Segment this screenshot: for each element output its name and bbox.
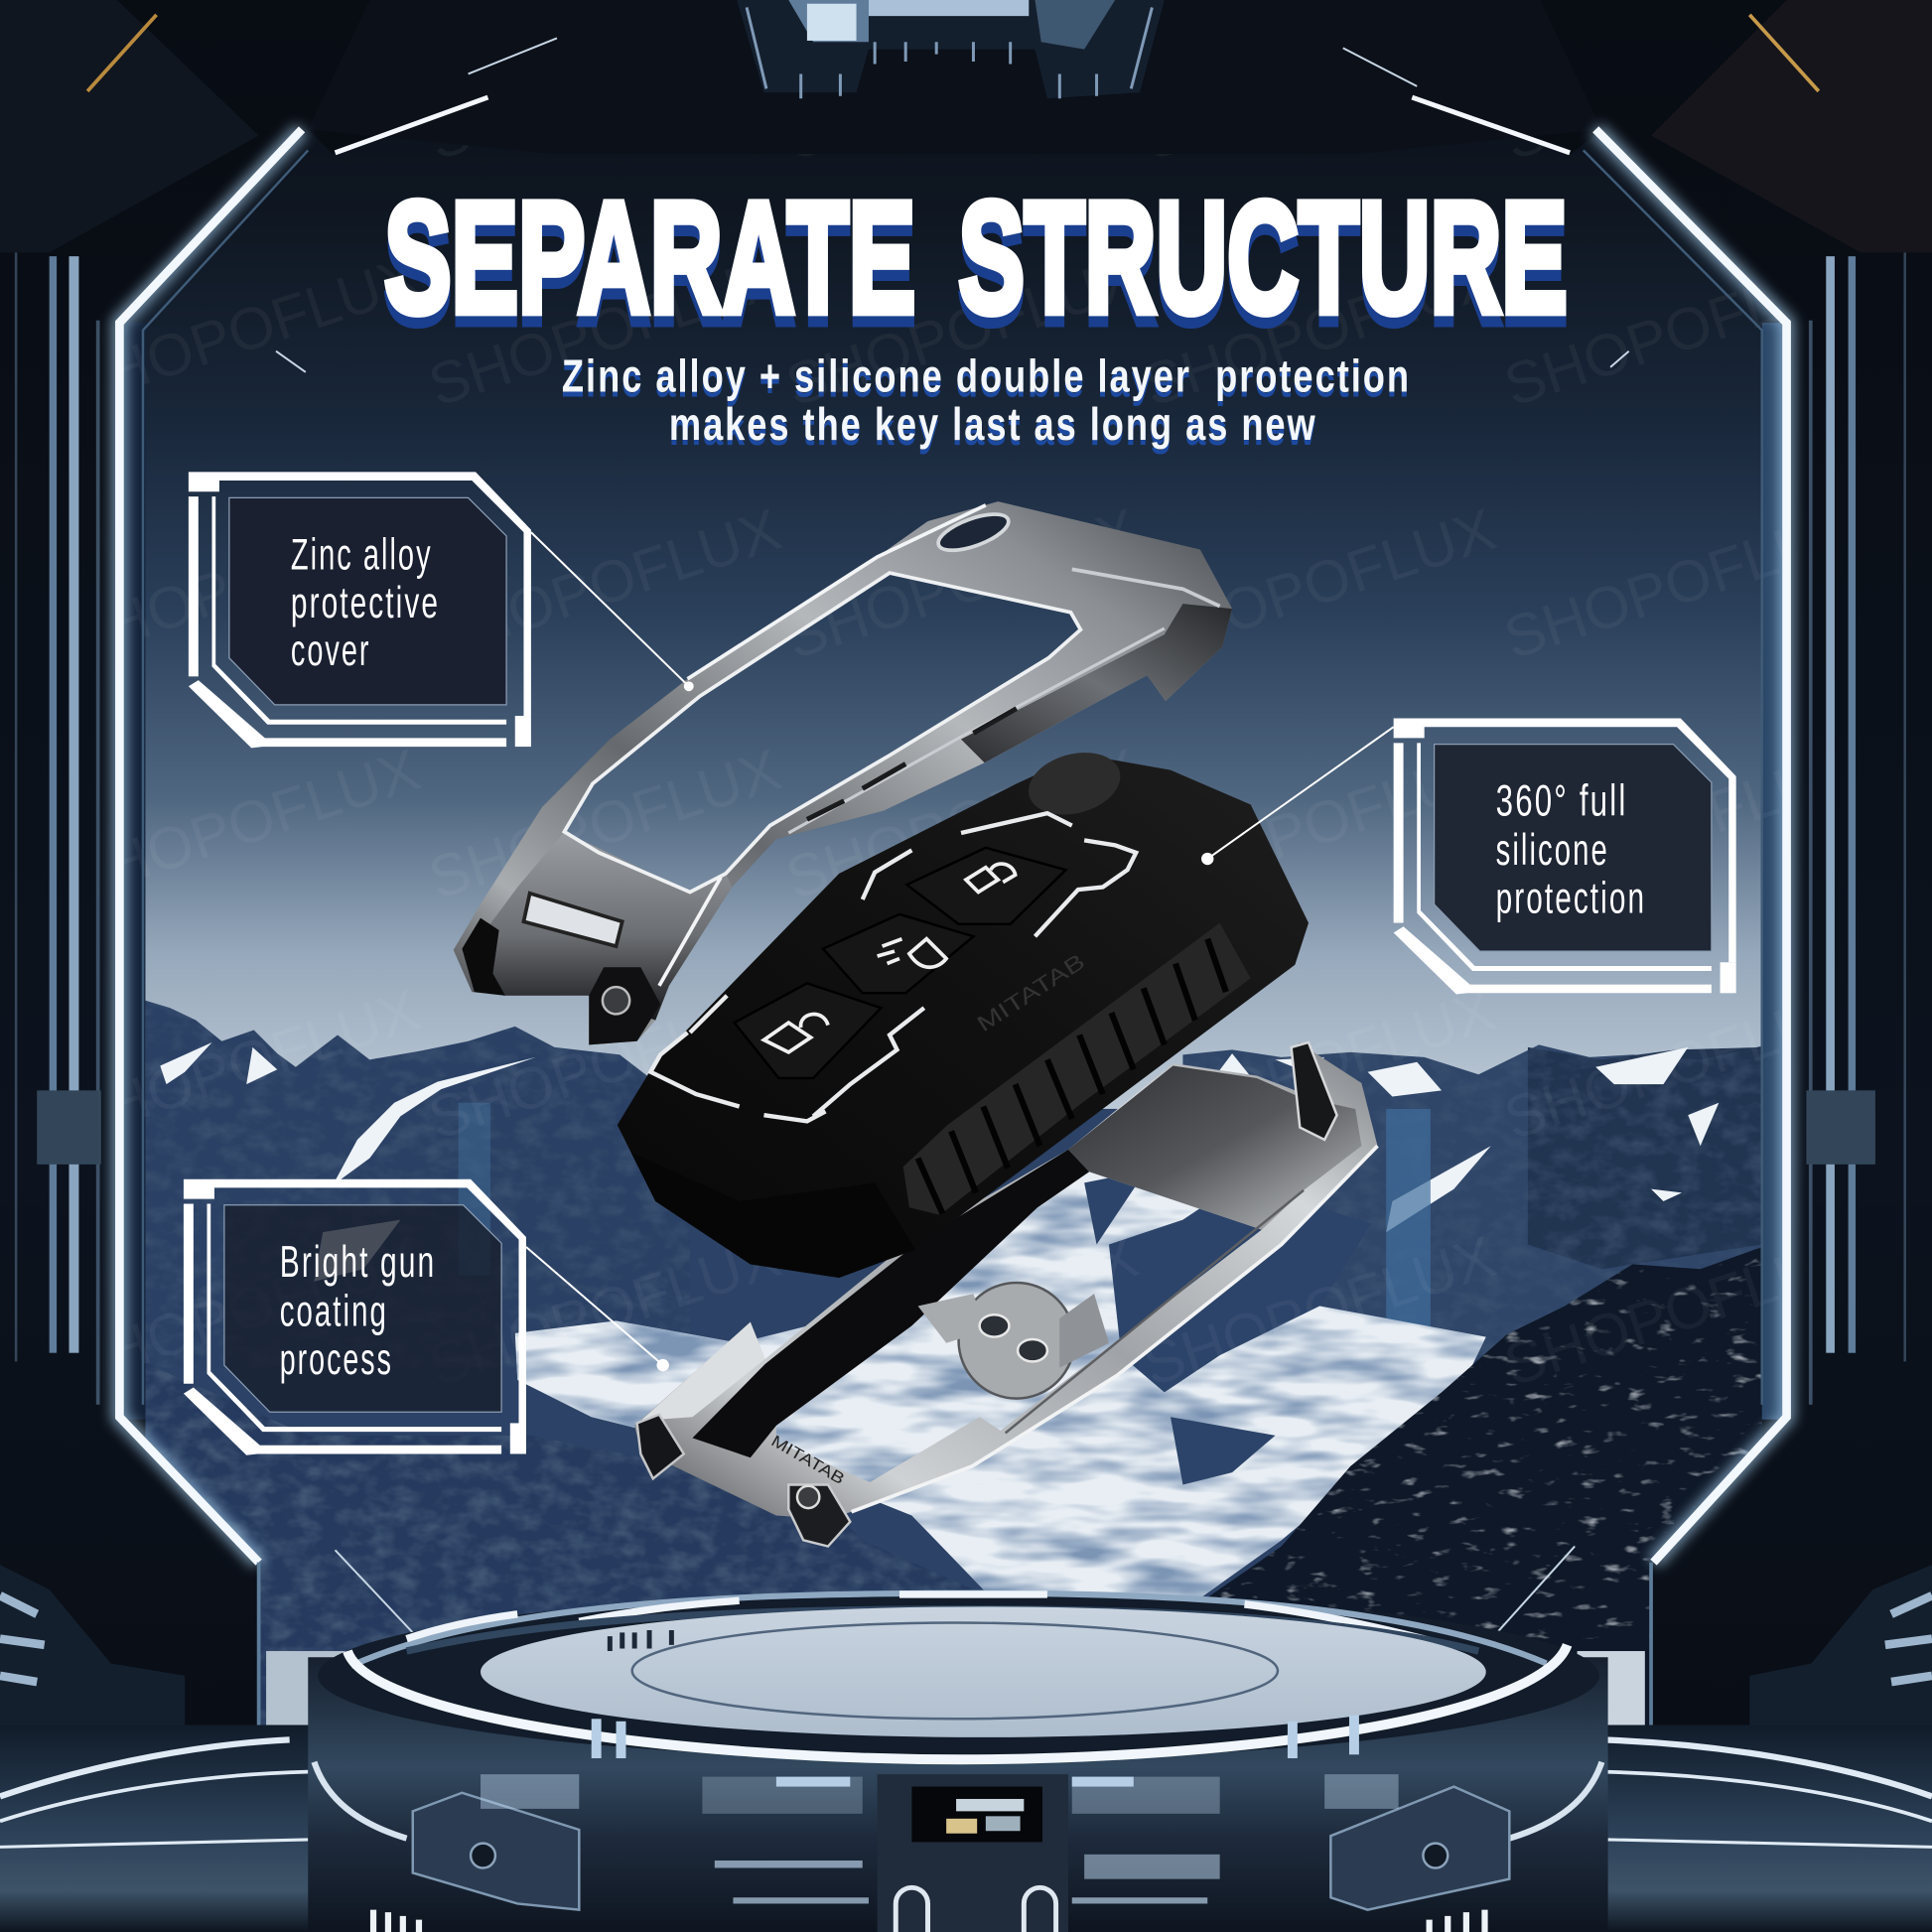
watermark: SHOPOFLUX: SHOPOFLUX: [421, 243, 788, 419]
right black screw tab: [589, 967, 660, 1044]
lower shell inner sheet: [1068, 1066, 1361, 1230]
title: [384, 169, 1568, 356]
watermark: SHOPOFLUX: SHOPOFLUX: [1496, 736, 1863, 911]
round plate with two holes: [918, 1283, 1109, 1399]
orange accent light right: [1749, 15, 1819, 91]
lower shell chrome edge: [852, 1146, 1378, 1512]
watermark: SHOPOFLUX: SHOPOFLUX: [778, 243, 1146, 419]
right wall pillar lines: [1809, 252, 1906, 1405]
callout panel shape: [224, 1205, 501, 1412]
watermark: SHOPOFLUX: SHOPOFLUX: [421, 0, 788, 173]
shell window chrome rim: [564, 573, 1080, 893]
watermark: SHOPOFLUX: SHOPOFLUX: [778, 976, 1146, 1152]
key button bottom: unlock: [735, 983, 881, 1078]
fob ribbed grip: [903, 923, 1251, 1215]
subtitle: Zinc alloy + silicone double layer protection: [562, 350, 1411, 402]
shell front slot: [523, 894, 622, 946]
silicone key fob body: [618, 743, 1309, 1278]
fob top button nub: [1022, 743, 1127, 824]
watermark: SHOPOFLUX: SHOPOFLUX: [1136, 0, 1503, 173]
snow field: [514, 1172, 1486, 1596]
top shell: zinc alloy protective cover: [454, 501, 1232, 1044]
watermark: SHOPOFLUX: SHOPOFLUX: [1136, 736, 1503, 911]
left black screw tab: [462, 918, 505, 996]
callout text: [280, 1238, 436, 1384]
callout text: Zinc alloy: [291, 530, 433, 579]
disc inner circle: [632, 1622, 1278, 1719]
blue tower right: [1386, 1109, 1431, 1343]
callout text: silicone: [1496, 826, 1609, 875]
platform cylinder: [308, 1657, 1608, 1932]
ring bright segments: [407, 1594, 1442, 1644]
watermark: SHOPOFLUX: SHOPOFLUX: [778, 1222, 1146, 1399]
glowing window frame: [119, 129, 1787, 1725]
disc tick marks: [610, 1630, 671, 1651]
subtitle: Zinc alloy + silicone double layer protection: [562, 355, 1411, 407]
lower shell clip tab: [1292, 1042, 1337, 1140]
callout text: process: [280, 1335, 393, 1384]
watermark: SHOPOFLUX: SHOPOFLUX: [60, 976, 427, 1152]
watermark: SHOPOFLUX: SHOPOFLUX: [1136, 1222, 1503, 1399]
background: mountain landscape: [145, 998, 1768, 1749]
lower wall glints: [0, 1595, 1932, 1682]
shell chrome highlights: [659, 505, 1220, 986]
engraved brand on fob: MITATAB: [972, 949, 1089, 1036]
ceiling dark fill: [308, 0, 1601, 154]
mountain snow patches: [160, 1042, 1719, 1282]
shell dark right flank: [961, 604, 1232, 762]
title: SEPARATE: [384, 169, 915, 345]
platform disc: [481, 1606, 1486, 1737]
watermark: SHOPOFLUX: SHOPOFLUX: [1136, 976, 1503, 1152]
callout: bright gun coating process: [184, 1179, 526, 1455]
left lower machinery: [0, 1565, 185, 1774]
key button middle: headlight: [823, 914, 973, 993]
callout text: protective: [291, 579, 440, 627]
shell key-ring hole: [934, 507, 1013, 558]
lower shell left chrome plate: [640, 1322, 765, 1421]
watermark: SHOPOFLUX: SHOPOFLUX: [421, 495, 788, 671]
watermark: SHOPOFLUX: SHOPOFLUX: [1496, 976, 1863, 1152]
title: SEPARATE: [384, 180, 915, 356]
side console right: [1578, 1651, 1645, 1725]
left wall pillar lines: [15, 252, 100, 1405]
title: STRUCTURE: [959, 169, 1568, 345]
background: sky through window: [0, 0, 1932, 1109]
callout text: cover: [291, 626, 371, 675]
watermark: SHOPOFLUX: SHOPOFLUX: [60, 736, 427, 911]
watermark: SHOPOFLUX: SHOPOFLUX: [1496, 1222, 1863, 1399]
callout frame: [189, 472, 531, 748]
watermark: SHOPOFLUX: SHOPOFLUX: [1136, 495, 1503, 671]
shell dark lower-left body: [472, 832, 732, 1021]
circular platform: [308, 1591, 1608, 1932]
callout text: [1496, 777, 1646, 923]
leader line: gun coating callout: [526, 1247, 669, 1371]
lower-left screw joint: [637, 1415, 684, 1478]
callout text: Bright gun: [280, 1238, 436, 1287]
ceiling corner left: [0, 0, 259, 252]
ceiling light bar left: [336, 97, 487, 153]
watermark: SHOPOFLUX: SHOPOFLUX: [778, 495, 1146, 671]
leader line: zinc alloy callout: [531, 532, 694, 691]
lower shell: bright gun coating: [634, 1042, 1378, 1547]
console screen: [911, 1787, 1042, 1842]
platform glowing lower ring: [347, 1645, 1568, 1759]
watermark: SHOPOFLUX: SHOPOFLUX: [421, 736, 788, 911]
lower shell dark inner rail: [692, 1150, 1089, 1457]
watermark: SHOPOFLUX: SHOPOFLUX: [778, 736, 1146, 911]
subtitle: makes the key last as long as new: [669, 403, 1317, 455]
callout panel shape: [229, 497, 506, 705]
shell side slots: [807, 709, 1017, 819]
platform side curves: [314, 1762, 1601, 1839]
callout: 360 full silicone protection: [1394, 719, 1736, 995]
callout frame: [184, 1179, 526, 1455]
top center machinery: [737, 0, 1165, 98]
leader line: silicone callout: [1201, 727, 1394, 865]
engraved brand on lower shell: MITATAB: [768, 1432, 848, 1488]
watermark: SHOPOFLUX: SHOPOFLUX: [60, 1222, 427, 1399]
watermark: SHOPOFLUX: SHOPOFLUX: [778, 0, 1146, 173]
callout panel shape: [1435, 745, 1712, 951]
callout: zinc alloy protective cover: [189, 472, 531, 748]
side console left: [266, 1651, 352, 1725]
callout text: 360° full: [1496, 777, 1627, 826]
callout text: protection: [1496, 875, 1646, 923]
center console: [878, 1774, 1068, 1932]
orange accent light left: [87, 15, 157, 91]
bottom bright ticks: [373, 1910, 1484, 1932]
watermark: SHOPOFLUX: SHOPOFLUX: [1136, 243, 1503, 419]
platform outer ring: [318, 1591, 1599, 1759]
watermark: SHOPOFLUX: SHOPOFLUX: [421, 976, 788, 1152]
blue ridges crossing snow: [1084, 1171, 1371, 1484]
wall brackets: [37, 1090, 101, 1165]
title: STRUCTURE: [959, 180, 1568, 356]
callout frame: [1394, 719, 1736, 995]
ceiling corner right: [1651, 0, 1932, 252]
blue tower left: [459, 1102, 490, 1231]
floor and light arcs: [0, 1651, 1932, 1932]
callout text: [291, 530, 440, 675]
subtitle: makes the key last as long as new: [669, 398, 1317, 450]
silver button surround: [650, 813, 1136, 1121]
watermark: SHOPOFLUX: SHOPOFLUX: [421, 1222, 788, 1399]
platform side boxes: [413, 1793, 579, 1910]
bottom screw joint: [788, 1484, 850, 1547]
watermark: SHOPOFLUX: SHOPOFLUX: [60, 0, 427, 173]
upper thin lines: [276, 38, 1629, 1632]
ceiling light bar right: [1412, 97, 1570, 153]
watermark: SHOPOFLUX: [60, 0, 1863, 1399]
window side strips: [119, 323, 145, 1420]
lower-left dark slope: [264, 1416, 924, 1569]
watermark: SHOPOFLUX: SHOPOFLUX: [1496, 495, 1863, 671]
console arches: [896, 1887, 1056, 1932]
key button top: lock: [906, 848, 1066, 924]
watermark: SHOPOFLUX: SHOPOFLUX: [60, 243, 427, 419]
fob lower dark face: [630, 1152, 915, 1278]
watermark: SHOPOFLUX: SHOPOFLUX: [60, 495, 427, 671]
right dark rock face: [1201, 1247, 1762, 1725]
watermark: SHOPOFLUX: SHOPOFLUX: [1496, 243, 1863, 419]
platform panel highlights: [481, 1716, 1399, 1903]
subtitle: [562, 350, 1411, 455]
callout text: coating: [280, 1287, 388, 1335]
watermark: SHOPOFLUX: SHOPOFLUX: [1496, 0, 1863, 173]
